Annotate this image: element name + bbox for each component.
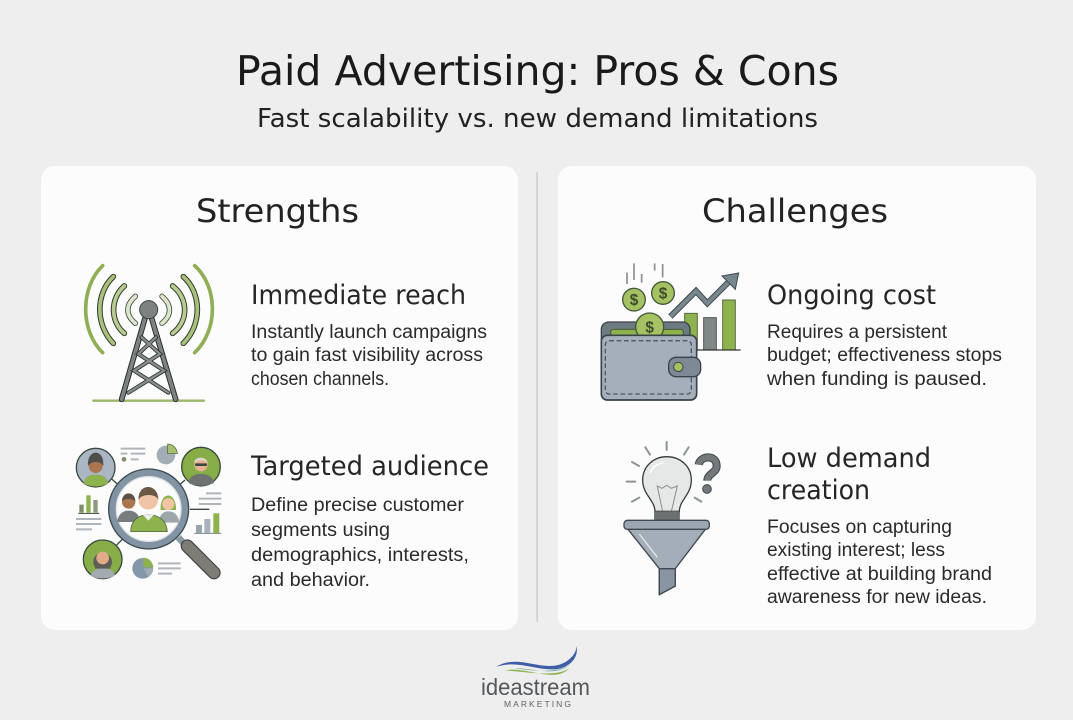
immediate reach heading: Immediate reach [251, 280, 466, 311]
panel: strengths [41, 166, 518, 630]
ongoing cost body [766, 322, 1002, 390]
logo tagline: MARKETING [504, 699, 571, 709]
low demand creation body [767, 517, 992, 608]
magnifier lens [109, 469, 189, 549]
challenges heading: Challenges [702, 192, 888, 230]
immediate reach body [251, 322, 487, 390]
logo: ideastream marketing [481, 646, 590, 709]
targeted audience body: demographics, interests, [251, 545, 469, 566]
icon: wallet with coins and chart: $ [645, 320, 654, 337]
targeted audience heading: Targeted audience [250, 451, 489, 482]
low demand creation heading [767, 443, 931, 506]
panel: challenges [558, 166, 1036, 630]
ongoing cost heading: Ongoing cost [767, 280, 936, 311]
ongoing cost body: Requires a persistent [767, 322, 948, 343]
logo waves [496, 646, 577, 675]
targeted audience body: Define precise customer [251, 495, 465, 516]
icon: audience magnifier [76, 444, 221, 579]
low demand creation body: effective at building brand [767, 564, 992, 585]
targeted audience body: and behavior. [251, 570, 370, 591]
icon: wallet with coins and chart [601, 263, 741, 400]
icon: radio tower [86, 266, 212, 401]
magnifier handle [178, 537, 186, 546]
ongoing cost body: when funding is paused. [766, 369, 987, 390]
immediate reach body: chosen channels. [251, 369, 389, 390]
mini charts [76, 444, 221, 579]
low demand creation body: existing interest; less [767, 540, 945, 561]
targeted audience body [251, 495, 469, 591]
low demand creation body: awareness for new ideas. [767, 587, 987, 608]
icon: wallet with coins and chart: $ [630, 292, 639, 309]
immediate reach body: Instantly launch campaigns [251, 322, 487, 343]
strengths heading: Strengths [196, 192, 359, 230]
icon: wallet with coins and chart: $ [659, 285, 668, 302]
subtitle: Fast scalability vs. new demand limitations [257, 104, 818, 134]
title: Paid Advertising: Pros & Cons [236, 47, 839, 95]
low demand creation heading: creation [767, 475, 870, 506]
low demand creation heading: Low demand [767, 443, 931, 474]
logo wordmark: ideastream [481, 674, 590, 700]
persons in circles [84, 453, 214, 578]
low demand creation body: Focuses on capturing [767, 517, 952, 538]
icon: light bulb in funnel [624, 442, 717, 595]
immediate reach body: to gain fast visibility across [251, 345, 483, 366]
targeted audience body: segments using [251, 520, 390, 541]
ongoing cost body: budget; effectiveness stops [767, 345, 1002, 366]
